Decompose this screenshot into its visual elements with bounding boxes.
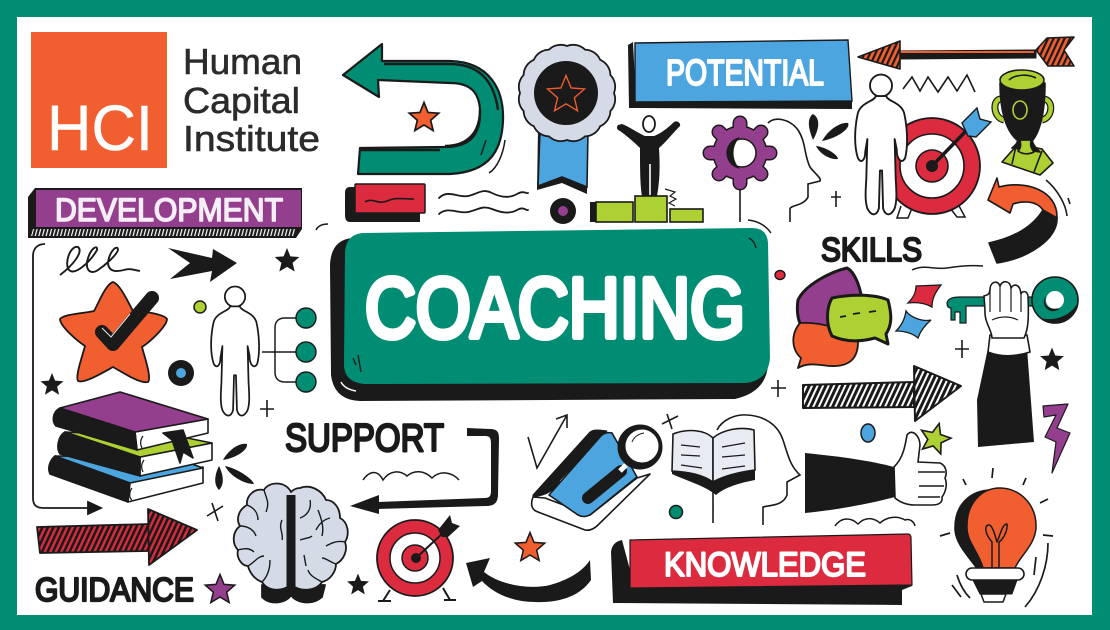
diamond: blue	[896, 311, 931, 338]
wavy lines	[439, 191, 528, 214]
star: lime	[917, 420, 954, 455]
organisation name: Institute	[183, 118, 320, 159]
star: black	[347, 574, 369, 594]
target with arrow	[884, 108, 991, 218]
hatched arrow: black	[803, 366, 961, 421]
dot: red	[775, 270, 785, 280]
zigzag	[903, 75, 975, 92]
top book	[53, 392, 208, 450]
person figure left	[211, 286, 259, 416]
award rosette	[519, 45, 615, 194]
organisation name: Capital	[183, 80, 300, 121]
target small	[377, 515, 460, 601]
dot: teal	[670, 506, 682, 518]
head outline with splash	[740, 114, 848, 222]
banner: potential: POTENTIAL	[666, 52, 824, 93]
red box with squiggle	[345, 184, 425, 222]
check arrow	[528, 415, 567, 468]
coaching main panel	[330, 220, 771, 401]
star: orange	[409, 102, 439, 131]
support squiggle	[363, 472, 459, 480]
bent black arrow	[350, 428, 499, 514]
coaching title: COACHING	[365, 261, 745, 355]
key	[947, 277, 1078, 324]
curved arrow orange and black	[988, 178, 1070, 263]
thumbs up	[805, 432, 946, 513]
lightning bolt	[1043, 404, 1070, 473]
loop squiggle	[60, 247, 140, 275]
organisation name	[183, 41, 320, 159]
hatched arrow: red	[37, 509, 197, 565]
plus sign	[771, 380, 786, 397]
splash marks	[215, 444, 254, 490]
plus sign	[955, 340, 969, 358]
dot: lime	[194, 301, 206, 313]
star: black left	[41, 373, 63, 395]
black arrow	[168, 248, 237, 282]
plus sign	[662, 414, 678, 429]
blue book with magnifier	[532, 425, 662, 530]
dot: purple	[550, 198, 576, 224]
figure on podium	[590, 116, 703, 222]
dot: blue oval	[861, 424, 875, 442]
long arrow top right	[858, 37, 1074, 69]
bottom book	[49, 456, 203, 502]
bookmark	[163, 430, 193, 463]
light bulb	[940, 468, 1053, 607]
org connector	[262, 308, 316, 392]
U-turn green arrow	[343, 44, 505, 174]
speech bubbles	[793, 268, 891, 368]
orange star with check	[60, 282, 167, 382]
plus sign	[831, 191, 841, 207]
gear icon	[710, 123, 770, 183]
star: black right	[1040, 348, 1064, 370]
stack of books	[49, 392, 212, 502]
hand holding key	[947, 277, 1078, 447]
dot: blue	[168, 360, 194, 386]
banner: development	[28, 188, 302, 238]
banner: development: DEVELOPMENT	[55, 192, 283, 228]
banner: knowledge	[611, 534, 912, 605]
diamond: red	[908, 285, 941, 307]
logo: Human Capital Institute	[31, 32, 320, 168]
organisation name: Human	[183, 41, 302, 82]
person figure right	[855, 75, 907, 214]
plus sign	[207, 503, 223, 521]
star: black	[275, 248, 299, 272]
small stroke	[316, 224, 328, 230]
star: purple	[205, 574, 235, 603]
curved black arrow	[466, 558, 591, 602]
wavy underline	[912, 266, 983, 270]
plus sign	[260, 400, 274, 417]
logo letters HCI: HCI	[47, 92, 153, 164]
trophy	[995, 70, 1053, 175]
banner: potential	[628, 40, 852, 109]
logo square	[31, 32, 167, 168]
label: support: SUPPORT	[285, 417, 444, 460]
head outline with open book	[672, 415, 800, 525]
banner: knowledge: KNOWLEDGE	[664, 546, 866, 584]
label: skills: SKILLS	[821, 231, 922, 268]
thumb squiggle	[835, 517, 915, 526]
middle book	[58, 432, 212, 476]
brain	[234, 484, 348, 603]
star: orange	[515, 532, 545, 561]
label: guidance: GUIDANCE	[35, 571, 194, 608]
bracket arrow left	[33, 244, 101, 514]
